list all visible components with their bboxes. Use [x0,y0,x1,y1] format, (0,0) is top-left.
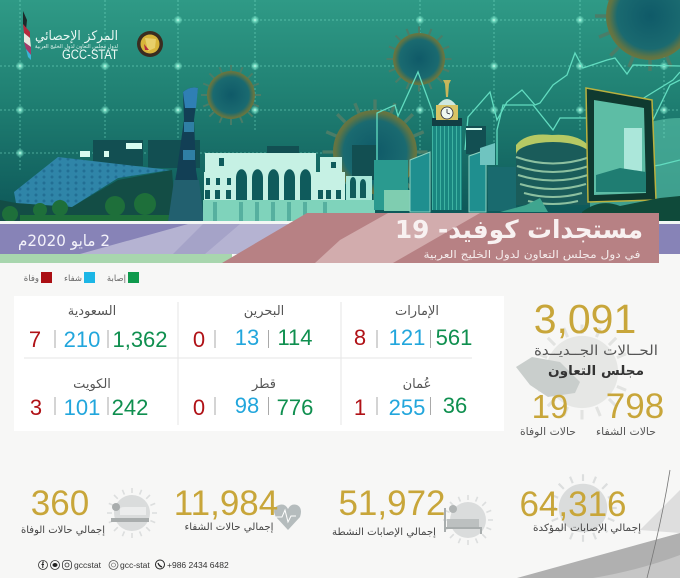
virus: behind towers [322,100,428,204]
recoveries: 798 [606,387,664,426]
new cases number: 3,091 [534,296,636,342]
grid glow dots [16,16,668,158]
country: UAE [354,304,472,350]
footer contacts [38,560,229,570]
distant dark buildings [93,126,486,180]
round building [500,134,590,212]
Dubai frame [586,88,656,202]
deaths: 19 [532,388,568,425]
left towers cluster [346,152,430,212]
country: Oman: 1 [354,395,366,420]
medium lavender facet [173,224,240,254]
country: Qatar: 0 [193,395,205,420]
right towers cluster [469,143,516,212]
panel: country table [14,296,504,431]
country: Qatar: 98 [235,393,259,418]
subtitle: في دول مجلس التعاون لدول الخليج العربية [424,249,640,261]
country: Saudi Arabia: 210 [64,327,100,352]
legend: infection: إصابة [107,274,126,284]
logo GCC-STAT: GCC-STAT [62,47,118,62]
country: Kuwait [30,377,148,420]
logo flag ribbon [23,11,31,60]
legend [24,272,139,284]
rose title panel [222,213,659,263]
icon: whatsapp [156,560,164,569]
phone number: +986 2434 6482 [167,560,229,570]
virus: top right [595,0,680,71]
handle gcc-stat: gcc-stat [120,560,150,570]
country: Saudi Arabia [29,304,168,352]
country: Qatar: 776 [277,395,313,420]
header illustration [0,0,680,224]
pale lavender facets [80,224,320,254]
country: Bahrain: 114 [277,325,313,350]
country: Saudi Arabia: 1,362 [112,327,168,352]
Oman opera building [203,153,375,222]
greenery and road under the frame [582,196,680,222]
garden and dark base [0,170,176,222]
active label: إجمالي الإصابات النشطة [332,527,436,538]
green band [0,254,232,263]
country: Bahrain: 0 [193,327,205,352]
virus: centre [386,27,452,92]
GCC label: مجلس التعاون [548,364,644,379]
reflecting floor [203,200,375,222]
deaths label: حالات الوفاة [520,426,576,438]
country: UAE: الإمارات [395,304,439,319]
recovered number: 11,984 [174,484,278,523]
Kuwait pavilion [14,157,170,207]
country: Kuwait: 101 [64,395,100,420]
icon: virus with patient [107,488,157,538]
main title: مستجدات كوفيد- 19 [395,215,643,245]
new cases label: الحــالات الجــديــدة [534,343,658,359]
country: UAE: 8 [354,325,366,350]
country: Bahrain: البحرين [244,304,284,319]
country: Kuwait: الكويت [73,377,111,392]
panel: new cases summary [516,296,664,438]
country: Saudi Arabia: السعودية [68,304,116,319]
confirmed label: إجمالي الإصابات المؤكدة [533,523,641,534]
rose facet [315,213,480,263]
icon: virus with hospital bed [443,495,493,545]
legend: death: وفاة [24,274,39,284]
icon: instagram [62,560,72,570]
deaths label: إجمالي حالات الوفاة [21,525,105,536]
icon: virus [549,474,617,542]
icon: twitter [50,560,60,570]
stat: total confirmed [519,474,641,542]
country: Oman: 255 [389,395,425,420]
GCC emblem [137,31,163,57]
light area behind the frame [590,118,680,215]
Qatar torch tower [168,88,204,222]
map and virus watermark [516,324,630,420]
stat: total active [332,484,493,545]
country: Kuwait: 242 [112,395,148,420]
clock tower [432,80,462,210]
logo Arabic name: المركز الإحصائي [35,29,118,44]
country: Oman [354,376,467,420]
recoveries label: حالات الشفاء [596,426,656,438]
date text: 2 مايو 2020م [18,231,110,251]
country: Saudi Arabia: 7 [29,327,41,352]
icon: heart [274,504,301,530]
country: Bahrain [193,304,313,352]
handle gccstat: gccstat [74,560,102,570]
country: Oman: عُمان [403,376,431,392]
stat: total deaths [21,484,157,538]
photo base strip [0,221,680,224]
country: UAE: 121 [389,325,425,350]
stat: total recovered [174,484,301,533]
country: Bahrain: 13 [235,325,259,350]
banner [0,213,680,263]
stock chart lines [377,53,680,180]
data grid [0,0,680,170]
logo block [23,11,163,62]
virus: top centre [201,65,261,125]
active number: 51,972 [338,484,446,523]
confirmed number: 64,316 [519,485,627,524]
country: UAE: 561 [436,325,472,350]
legend: recovery: شفاء [64,274,82,284]
arches [205,158,341,200]
country: Qatar: قطر [251,377,276,392]
recovered label: إجمالي حالات الشفاء [184,522,274,533]
trees [2,193,172,222]
logo subtitle: لدول مجلس التعاون لدول الخليج العربية [35,44,118,50]
deaths number: 360 [31,484,89,523]
distant building lights [80,128,482,157]
country: Kuwait: 3 [30,395,42,420]
decorative swoosh [517,470,680,578]
country: Qatar [193,377,313,420]
icon: snapchat [109,560,118,570]
icon: facebook [38,560,48,570]
country: Oman: 36 [443,393,467,418]
lavender band [0,224,680,254]
